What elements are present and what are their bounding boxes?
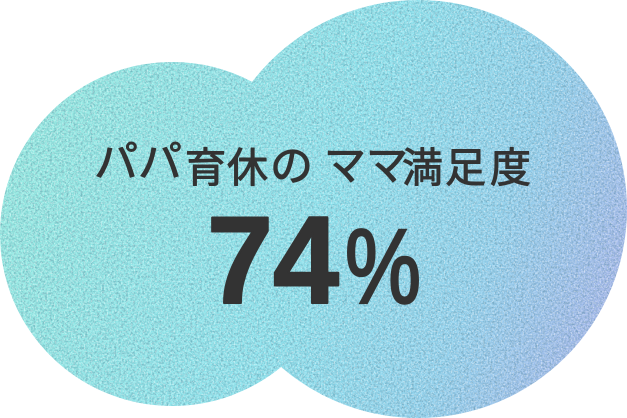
- heading: papa parental leave, mama satisfaction: 度: [490, 145, 531, 191]
- big number: 74%: 74: [207, 192, 339, 330]
- heading: papa parental leave, mama satisfaction: の: [270, 143, 313, 191]
- heading: papa parental leave, mama satisfaction: 育: [185, 145, 226, 191]
- heading: papa parental leave, mama satisfaction: 休: [227, 145, 268, 191]
- heading: papa parental leave, mama satisfaction: パパ: [94, 139, 182, 187]
- heading: papa parental leave, mama satisfaction: 足: [445, 145, 486, 191]
- heading: papa parental leave, mama satisfaction: [94, 139, 531, 191]
- heading: papa parental leave, mama satisfaction: 満: [402, 145, 443, 191]
- big number: 74%: [207, 192, 421, 330]
- heading: papa parental leave, mama satisfaction: ママ: [324, 142, 408, 189]
- big number: 74%: %: [345, 208, 421, 326]
